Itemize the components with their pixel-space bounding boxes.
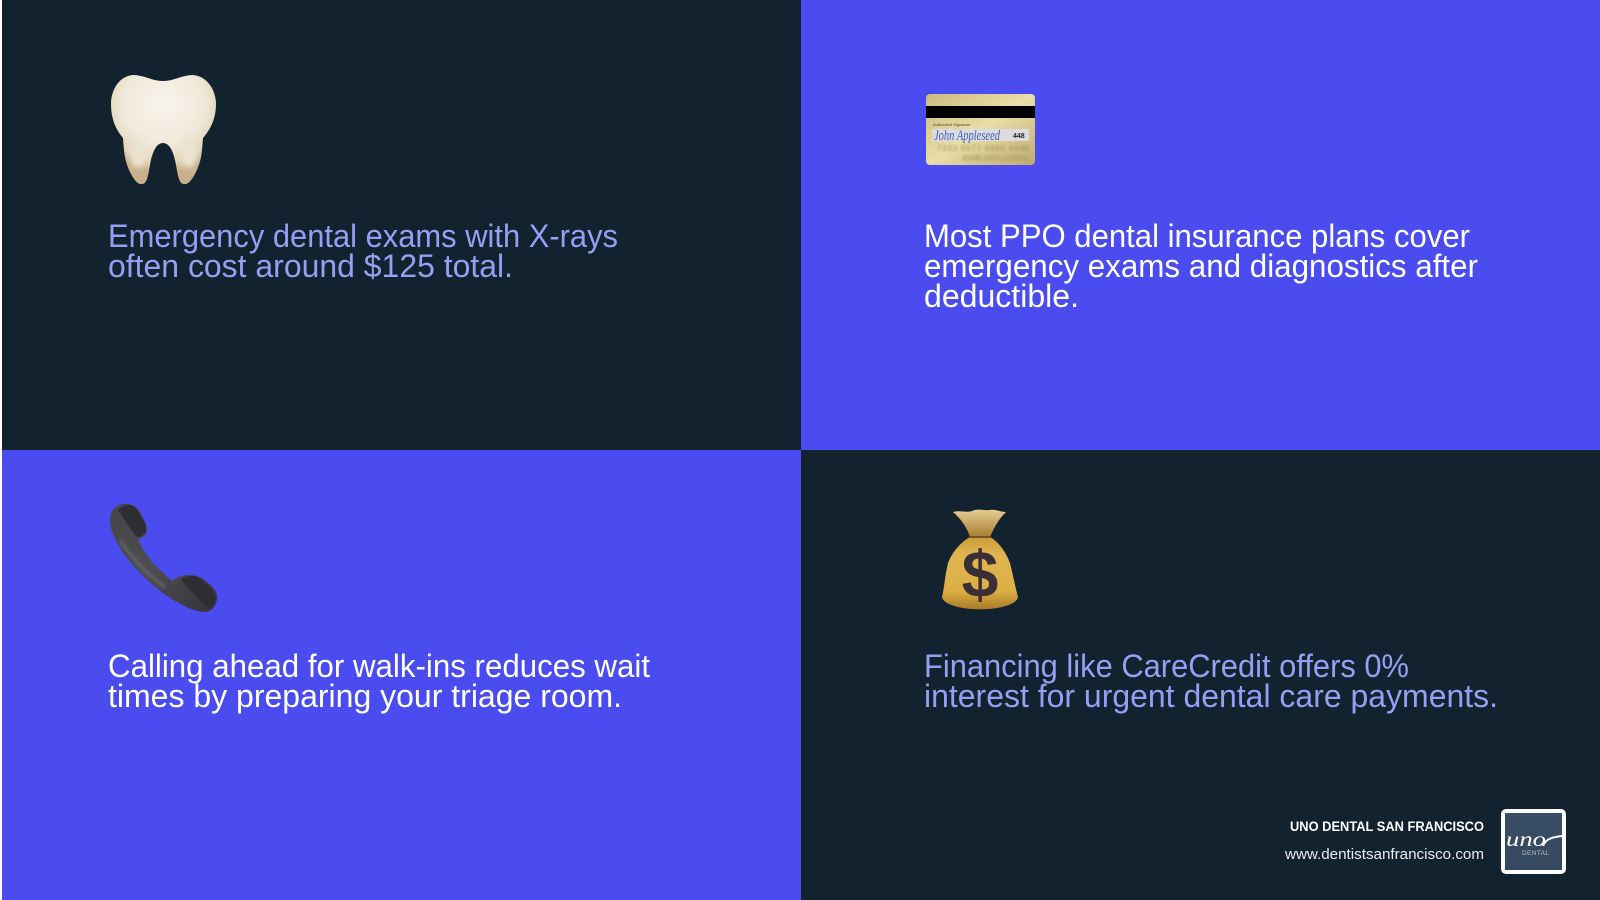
text: exam cost bbox=[108, 218, 618, 284]
icon: money bag bbox=[942, 510, 1018, 611]
icon: credit card: JOHN APPLESEED bbox=[961, 154, 1029, 163]
icon: credit card: 7333 5577 5000 4948 bbox=[937, 144, 1030, 153]
text: calling ahead: Calling ahead for walk-ins reduces wait bbox=[108, 648, 650, 684]
text: financing: Financing like CareCredit offers 0% bbox=[924, 648, 1409, 684]
text: exam cost: often cost around $125 total. bbox=[108, 248, 513, 284]
text: calling ahead bbox=[108, 648, 650, 714]
panel: calling ahead bbox=[2, 450, 801, 900]
text: insurance coverage: emergency exams and diagnostics after bbox=[924, 248, 1478, 284]
logo: uno dental: DENTAL bbox=[1522, 850, 1549, 857]
branding: clinic name and url bbox=[1284, 819, 1484, 863]
panel: exam cost bbox=[2, 0, 801, 450]
branding: clinic name and url: UNO DENTAL SAN FRANCISCO bbox=[1290, 819, 1484, 834]
panel: financing bbox=[801, 450, 1600, 900]
icon: telephone receiver bbox=[110, 504, 217, 612]
text: insurance coverage bbox=[924, 218, 1478, 314]
text: financing: interest for urgent dental care payments. bbox=[924, 678, 1498, 714]
icon: credit card: Authorized Signature bbox=[933, 122, 971, 127]
icon: credit card: John Appleseed bbox=[934, 128, 1000, 144]
text: insurance coverage: Most PPO dental insurance plans cover bbox=[924, 218, 1470, 254]
panel: insurance coverage bbox=[801, 0, 1600, 450]
icon: money bag: $ bbox=[962, 537, 998, 611]
text: exam cost: Emergency dental exams with X-rays bbox=[108, 218, 618, 254]
text: insurance coverage: deductible. bbox=[924, 278, 1079, 314]
branding: clinic name and url: www.dentistsanfrancisco.com bbox=[1284, 847, 1484, 863]
text: financing bbox=[924, 648, 1498, 714]
logo: uno dental bbox=[1501, 809, 1566, 874]
icon: credit card: 448 bbox=[1013, 133, 1025, 140]
icon: credit card bbox=[926, 94, 1035, 165]
icon: tooth bbox=[111, 75, 216, 184]
logo: uno dental: uno bbox=[1506, 827, 1546, 851]
text: calling ahead: times by preparing your triage room. bbox=[108, 678, 622, 714]
